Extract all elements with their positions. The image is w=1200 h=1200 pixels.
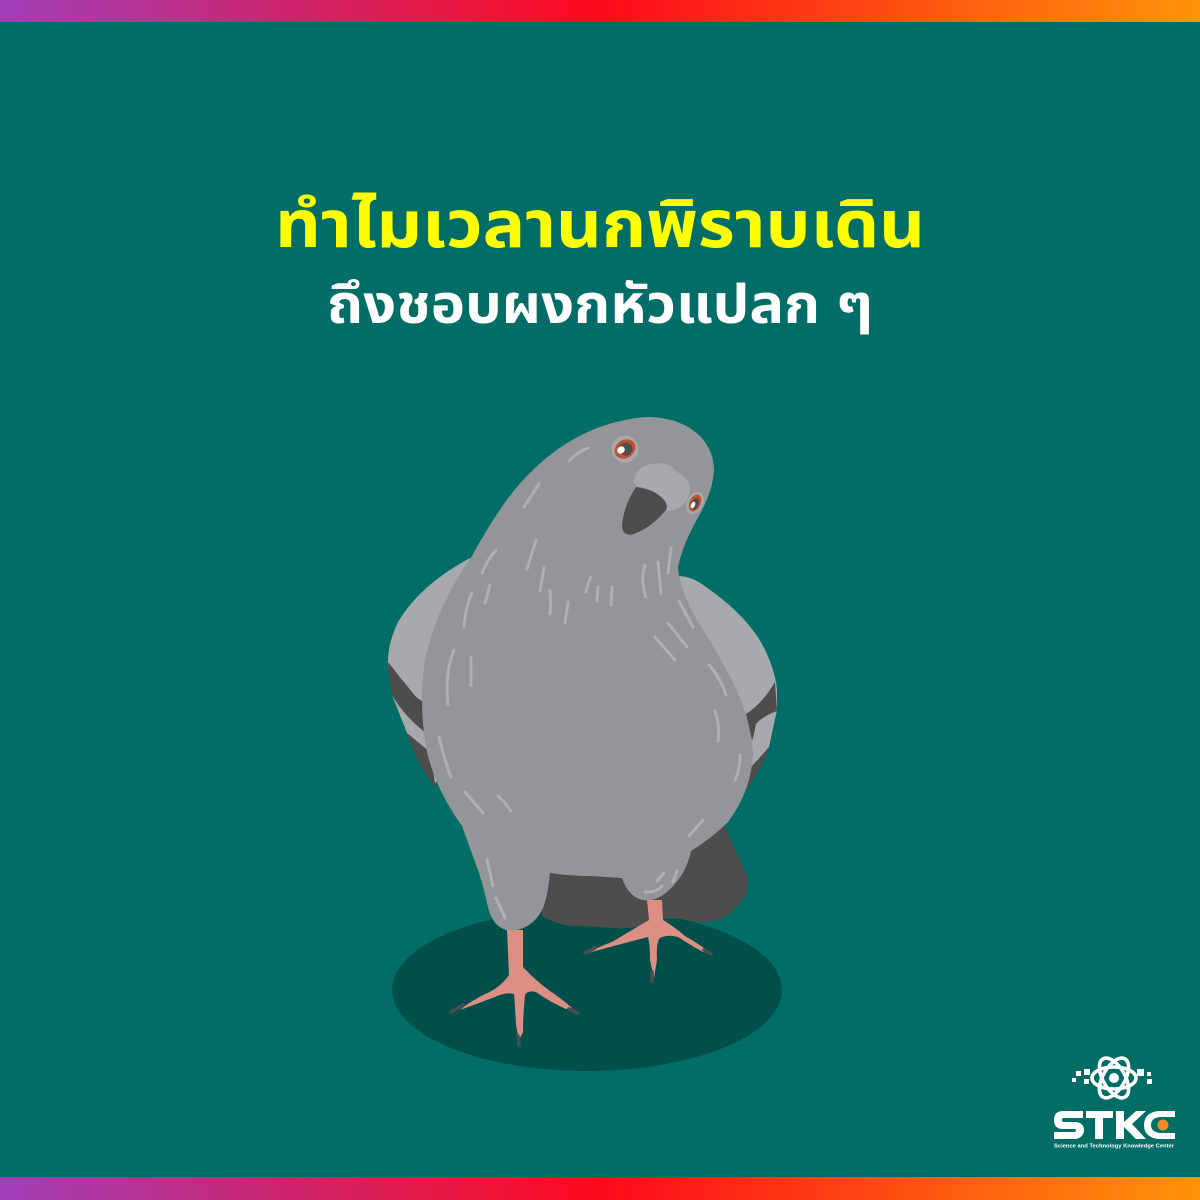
title: ทำไมเวลานกพิราบเดิน	[275, 187, 925, 261]
title	[275, 187, 925, 335]
eye left	[611, 435, 639, 463]
feather marks	[439, 448, 740, 918]
right wing	[660, 576, 777, 803]
left foot	[451, 930, 578, 1045]
logo atom icon	[1072, 1053, 1152, 1103]
title: ถึงชอบผงกหัวแปลก ๆ	[327, 275, 873, 335]
bottom gradient bar	[0, 1177, 1200, 1200]
logo wordmark	[1054, 1111, 1175, 1139]
body and head	[422, 417, 753, 931]
ground shadow	[392, 909, 782, 1071]
logo tagline: Science and Technology Knowledge Center	[1054, 1144, 1175, 1150]
logo: STKC	[1054, 1053, 1175, 1150]
eye right	[683, 489, 707, 517]
cere	[634, 463, 690, 511]
top gradient bar	[0, 0, 1200, 22]
illustration: pigeon	[388, 417, 777, 1045]
beak	[622, 487, 667, 535]
left wing	[388, 558, 480, 789]
tail	[540, 820, 748, 928]
right foot	[585, 900, 711, 981]
